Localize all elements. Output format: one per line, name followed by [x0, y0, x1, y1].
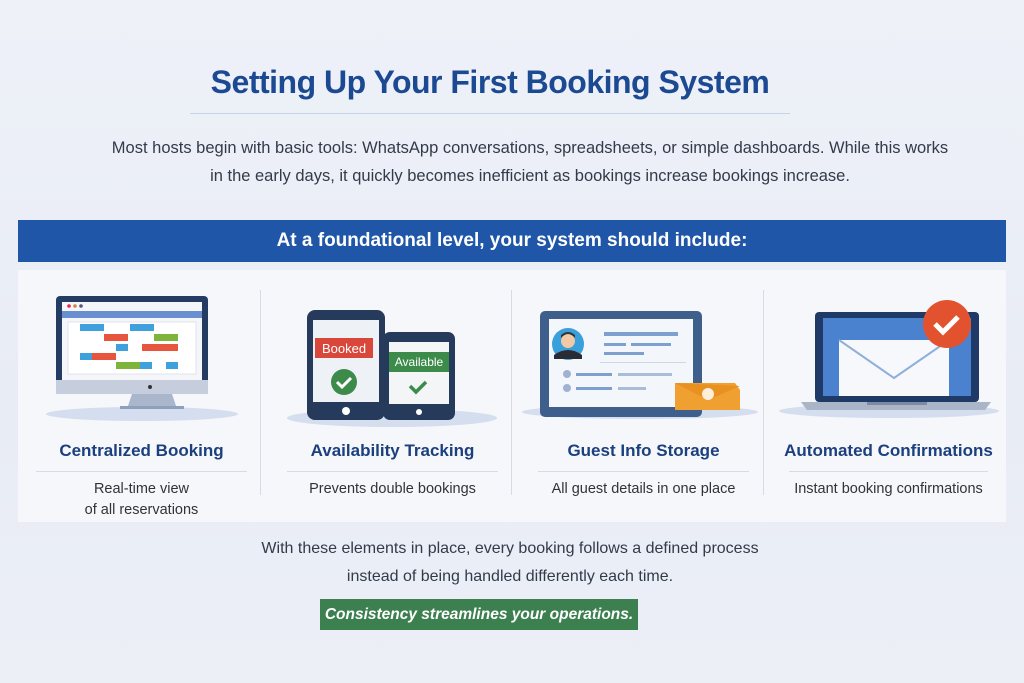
- feature: guest info storage: [522, 311, 758, 497]
- feature: availability tracking: [287, 310, 498, 497]
- title: Setting Up Your First Booking System: [211, 64, 769, 100]
- icon: desktop calendar: [46, 296, 238, 421]
- feature: centralized booking: [36, 296, 247, 518]
- tagline: Consistency streamlines your operations.: [325, 606, 633, 623]
- feature: automated confirmations: Instant booking confirmations: [794, 481, 983, 497]
- intro text: [112, 139, 948, 185]
- icon: phones booked available: Booked: [322, 341, 366, 356]
- icon: guest profile screen: [522, 311, 758, 419]
- feature: availability tracking: Availability Tracking: [311, 441, 474, 460]
- feature: automated confirmations: [779, 300, 999, 497]
- feature: automated confirmations: Automated Confirmations: [784, 441, 993, 460]
- icon: phones booked available: Available: [395, 355, 444, 369]
- banner: [18, 220, 1006, 262]
- feature: guest info storage: All guest details in one place: [552, 481, 735, 497]
- tagline: [320, 599, 638, 630]
- feature: centralized booking: of all reservations: [85, 502, 198, 518]
- outro text: With these elements in place, every booking follows a defined process: [261, 540, 759, 557]
- feature: centralized booking: Centralized Booking: [59, 441, 224, 460]
- outro text: [261, 540, 759, 585]
- banner: At a foundational level, your system should include:: [277, 230, 747, 251]
- panel: features: [18, 270, 1006, 522]
- feature: guest info storage: Guest Info Storage: [567, 441, 720, 460]
- feature: availability tracking: Prevents double bookings: [309, 481, 476, 497]
- icon: phones booked available: [287, 310, 497, 427]
- intro text: in the early days, it quickly becomes inefficient as bookings increase bookings increase.: [210, 167, 850, 185]
- intro text: Most hosts begin with basic tools: WhatsApp conversations, spreadsheets, or simple dashboards. While this works: [112, 139, 948, 157]
- feature: centralized booking: Real-time view: [94, 481, 189, 497]
- outro text: instead of being handled differently each time.: [347, 568, 673, 585]
- icon: laptop envelope check: [779, 300, 999, 418]
